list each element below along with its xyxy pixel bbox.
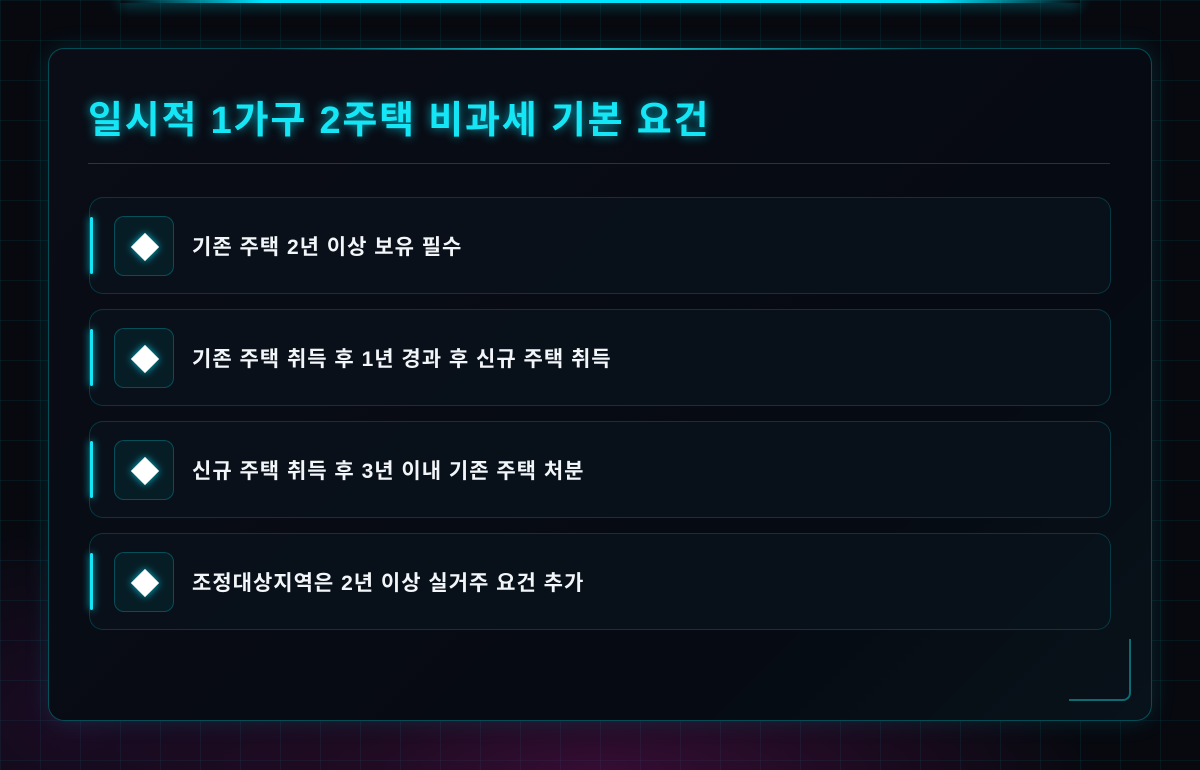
icon: diamond xyxy=(114,216,174,276)
item 4 xyxy=(89,533,1111,630)
icon: diamond xyxy=(114,440,174,500)
text: 기존 주택 취득 후 1년 경과 후 신규 주택 취득 xyxy=(192,348,612,371)
icon: diamond xyxy=(114,552,174,612)
item 3 xyxy=(89,421,1111,518)
icon: diamond xyxy=(114,328,174,388)
corner bracket xyxy=(1069,639,1131,701)
text: 신규 주택 취득 후 3년 이내 기존 주택 처분 xyxy=(192,460,584,483)
item 2 xyxy=(89,309,1111,406)
item 1 xyxy=(89,197,1111,294)
title: 일시적 1가구 2주택 비과세 기본 요건 xyxy=(88,100,710,142)
text: 기존 주택 2년 이상 보유 필수 xyxy=(192,236,462,259)
text: 조정대상지역은 2년 이상 실거주 요건 추가 xyxy=(192,572,584,595)
